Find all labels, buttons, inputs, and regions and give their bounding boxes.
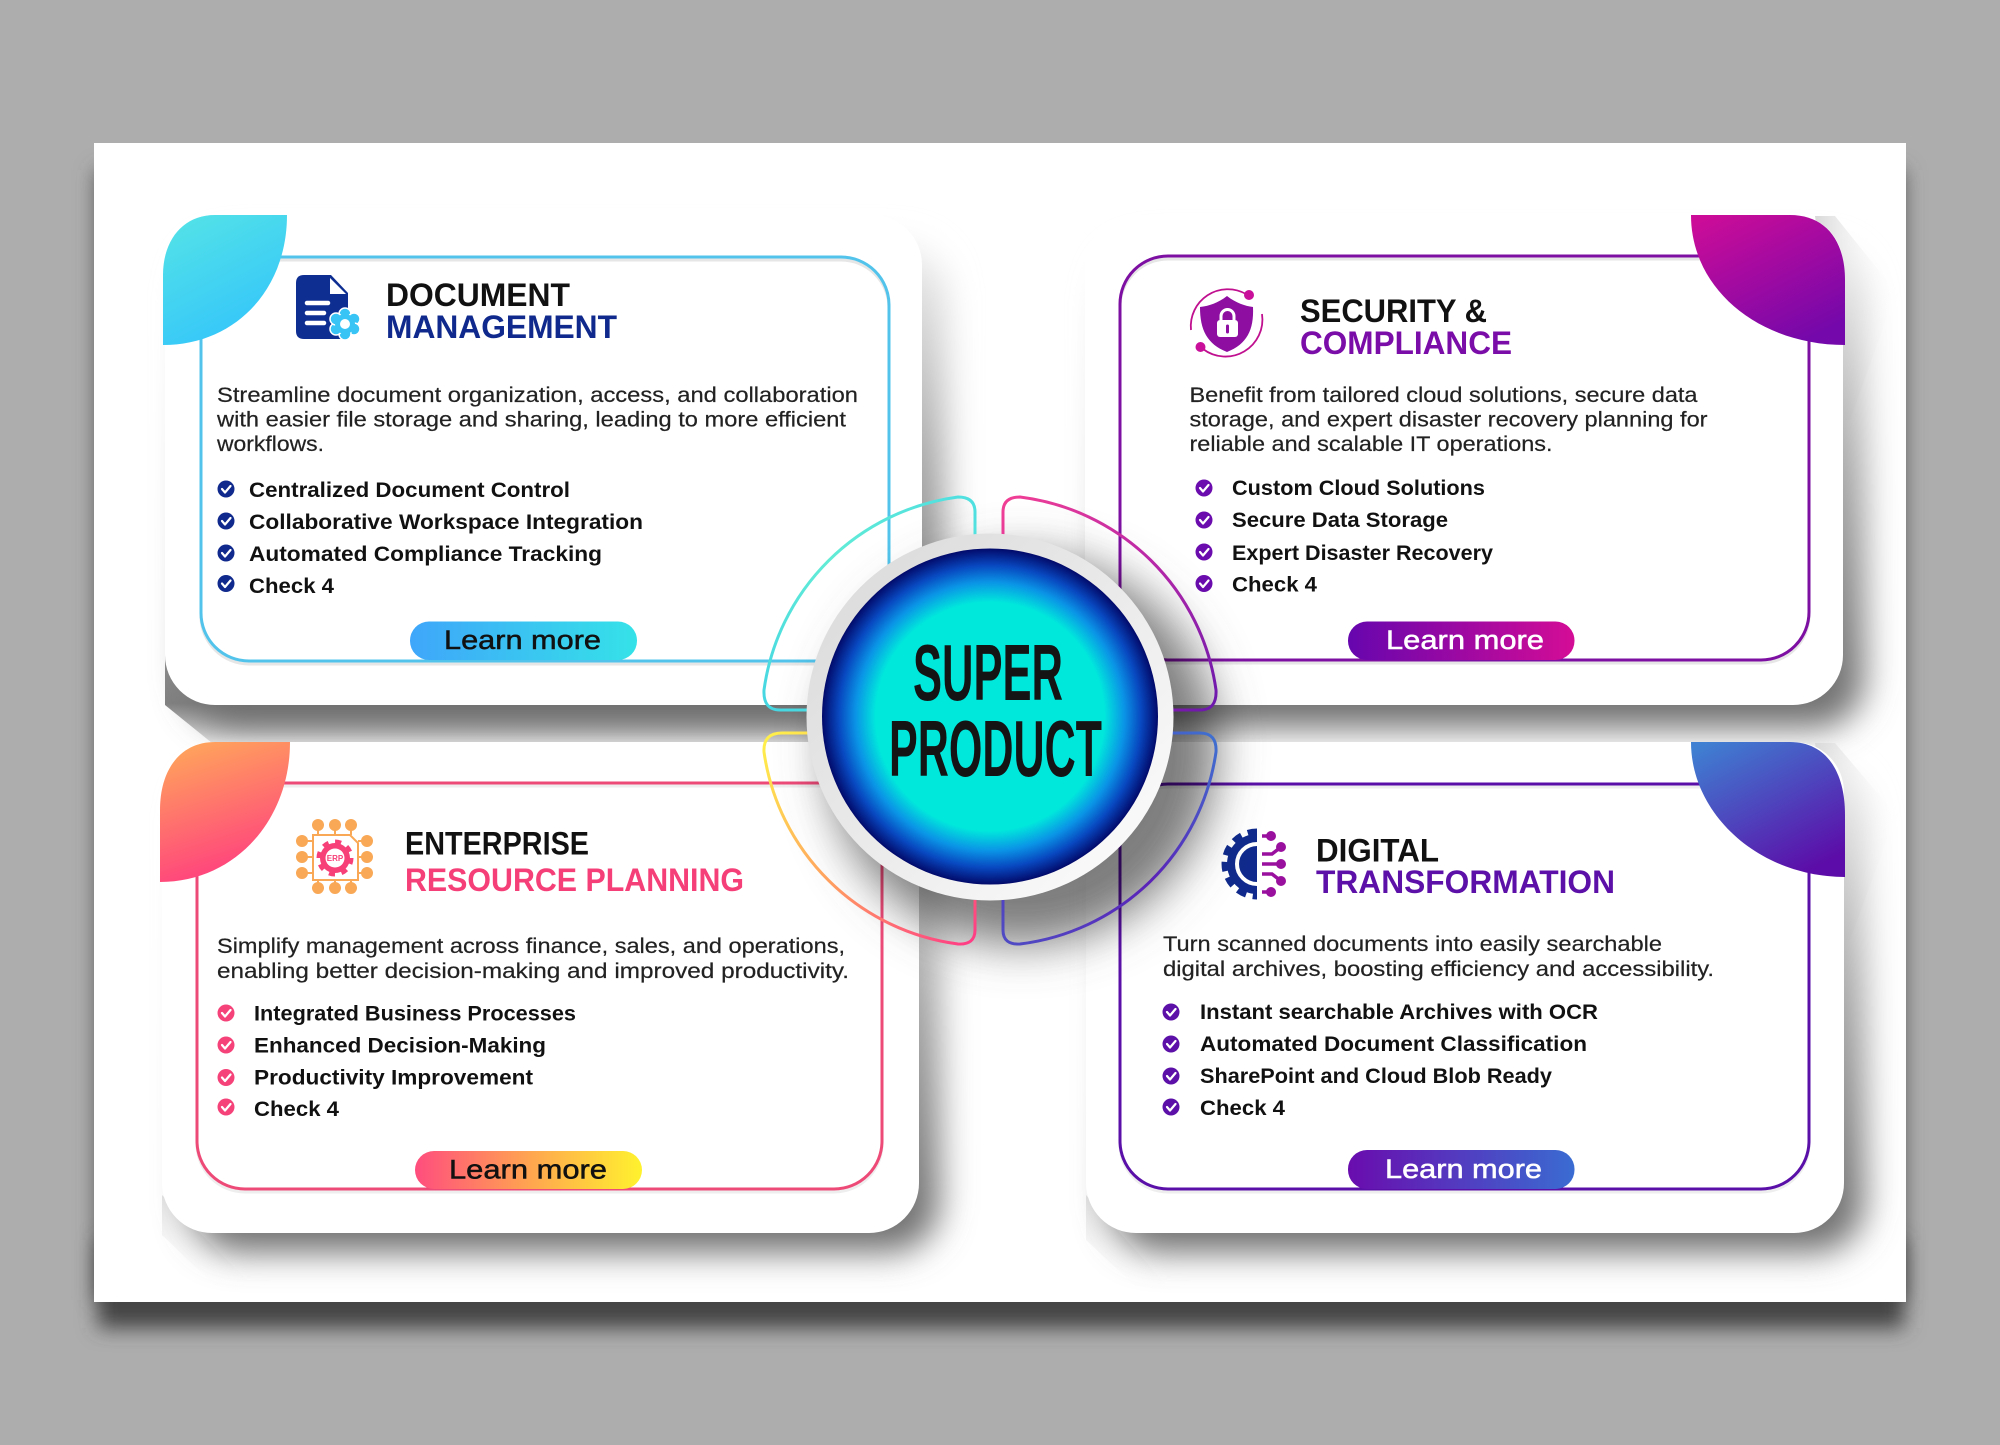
heading: SECURITY & <box>1300 293 1487 329</box>
description: with easier file storage and sharing, leading to more efficient <box>216 409 846 432</box>
checklist: Instant searchable Archives with OCR <box>1200 1001 1598 1024</box>
icon: document with gear <box>296 275 360 340</box>
description <box>1163 933 1714 981</box>
description: workflows. <box>216 433 324 456</box>
description <box>1190 384 1708 456</box>
heading: RESOURCE PLANNING <box>405 862 744 898</box>
description: Turn scanned documents into easily searchable <box>1163 933 1662 956</box>
button <box>415 1151 642 1189</box>
arc: top left teal <box>764 497 975 710</box>
central badge: super product <box>806 534 1174 900</box>
badge title: PRODUCT <box>889 704 1102 793</box>
checklist: Expert Disaster Recovery <box>1232 542 1493 565</box>
checklist: Automated Document Classification <box>1200 1033 1587 1056</box>
button <box>1348 622 1574 660</box>
description: storage, and expert disaster recovery planning for <box>1190 409 1708 432</box>
description <box>217 935 849 983</box>
checklist: Collaborative Workspace Integration <box>249 511 643 534</box>
badge title <box>889 628 1102 793</box>
checklist: Enhanced Decision-Making <box>254 1034 546 1058</box>
checklist: Integrated Business Processes <box>254 1002 576 1026</box>
button <box>1348 1150 1574 1189</box>
checklist: Custom Cloud Solutions <box>1232 477 1485 500</box>
checklist: Check 4 <box>1200 1097 1285 1120</box>
description: Simplify management across finance, sales, and operations, <box>217 935 845 958</box>
white panel <box>94 143 1906 1302</box>
heading <box>1316 832 1615 900</box>
leaf corner <box>163 215 287 345</box>
checklist <box>1196 477 1493 596</box>
leaf corner <box>1691 215 1845 345</box>
description: Streamline document organization, access, and collaboration <box>217 384 858 407</box>
description: enabling better decision-making and improved productivity. <box>217 960 849 983</box>
leaf corner <box>160 742 290 882</box>
panel: document management <box>163 215 922 705</box>
description: reliable and scalable IT operations. <box>1190 433 1552 456</box>
heading: COMPLIANCE <box>1300 325 1512 361</box>
checklist: Automated Compliance Tracking <box>249 543 602 566</box>
panel: digital transformation <box>1086 742 1845 1233</box>
panel shadow <box>96 170 1904 1328</box>
button: Learn more <box>1385 1154 1542 1184</box>
checklist: Productivity Improvement <box>254 1066 533 1090</box>
checklist: Secure Data Storage <box>1232 509 1448 532</box>
icon: ERP chip: ERP <box>327 854 344 863</box>
panel: security and compliance <box>1085 215 1845 705</box>
checklist: SharePoint and Cloud Blob Ready <box>1200 1065 1552 1088</box>
button: Learn more <box>1386 625 1544 655</box>
checklist <box>1162 1001 1598 1120</box>
description: digital archives, boosting efficiency and accessibility. <box>1163 958 1714 981</box>
button <box>410 622 637 660</box>
description: Benefit from tailored cloud solutions, secure data <box>1190 384 1698 407</box>
badge title: SUPER <box>913 628 1063 717</box>
leaf corner <box>1691 742 1845 877</box>
long shadows behind cards <box>162 216 1896 1300</box>
heading <box>386 277 617 345</box>
heading <box>405 825 744 898</box>
icon: shield with lock <box>1191 289 1262 357</box>
heading: ENTERPRISE <box>405 825 589 861</box>
icon: digital gear <box>1226 831 1286 897</box>
arc: bottom right blue to purple <box>1003 733 1216 944</box>
central circle shadow <box>827 555 1217 945</box>
icon: ERP chip <box>296 819 373 894</box>
arc: top right pink to purple <box>1003 497 1216 710</box>
checklist: Centralized Document Control <box>249 479 570 502</box>
description <box>216 384 858 456</box>
checklist: Check 4 <box>254 1098 339 1121</box>
button: Learn more <box>449 1155 607 1185</box>
arc: bottom left yellow to pink <box>764 733 975 944</box>
checklist <box>218 1002 576 1121</box>
heading: DIGITAL <box>1316 832 1439 868</box>
panel: enterprise resource planning <box>160 742 919 1233</box>
heading: TRANSFORMATION <box>1316 864 1615 900</box>
checklist <box>218 479 643 598</box>
heading <box>1300 293 1512 361</box>
checklist: Check 4 <box>249 575 334 598</box>
checklist: Check 4 <box>1232 574 1317 596</box>
heading: DOCUMENT <box>386 277 570 313</box>
heading: MANAGEMENT <box>386 309 617 345</box>
button: Learn more <box>444 625 601 655</box>
